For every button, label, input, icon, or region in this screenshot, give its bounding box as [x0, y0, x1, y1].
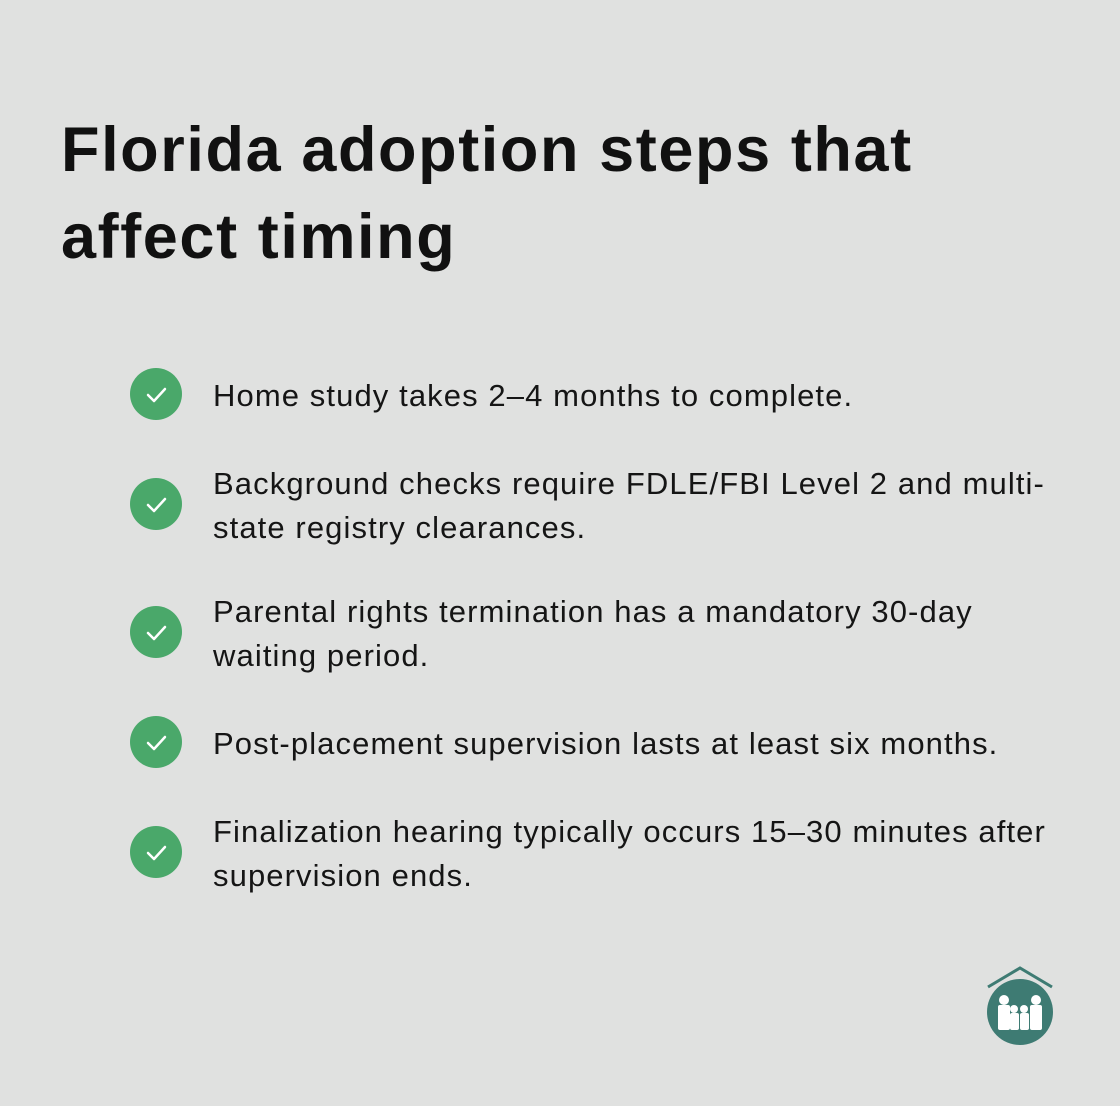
icon: check	[130, 478, 182, 530]
text	[213, 466, 1045, 545]
text	[213, 814, 1046, 893]
text: Finalization hearing typically occurs 15–30 minutes after	[213, 814, 1046, 849]
logo	[987, 966, 1053, 1045]
icon: check	[130, 826, 182, 878]
text: Home study takes 2–4 months to complete.	[213, 378, 853, 413]
item 2	[130, 466, 1045, 545]
item 1	[130, 368, 853, 420]
text: Post-placement supervision lasts at least six months.	[213, 726, 998, 761]
text: Parental rights termination has a mandatory 30-day	[213, 594, 973, 629]
item 4	[130, 716, 998, 768]
text: Background checks require FDLE/FBI Level 2 and multi-	[213, 466, 1045, 501]
icon: check	[130, 716, 182, 768]
text	[213, 594, 973, 673]
title: Florida adoption steps that	[61, 115, 913, 185]
text: waiting period.	[213, 638, 429, 673]
item 5	[130, 814, 1046, 893]
icon: check	[130, 368, 182, 420]
text: supervision ends.	[213, 858, 473, 893]
text: state registry clearances.	[213, 510, 586, 545]
title	[61, 115, 913, 272]
title: affect timing	[61, 202, 456, 272]
item 3	[130, 594, 973, 673]
icon: check	[130, 606, 182, 658]
